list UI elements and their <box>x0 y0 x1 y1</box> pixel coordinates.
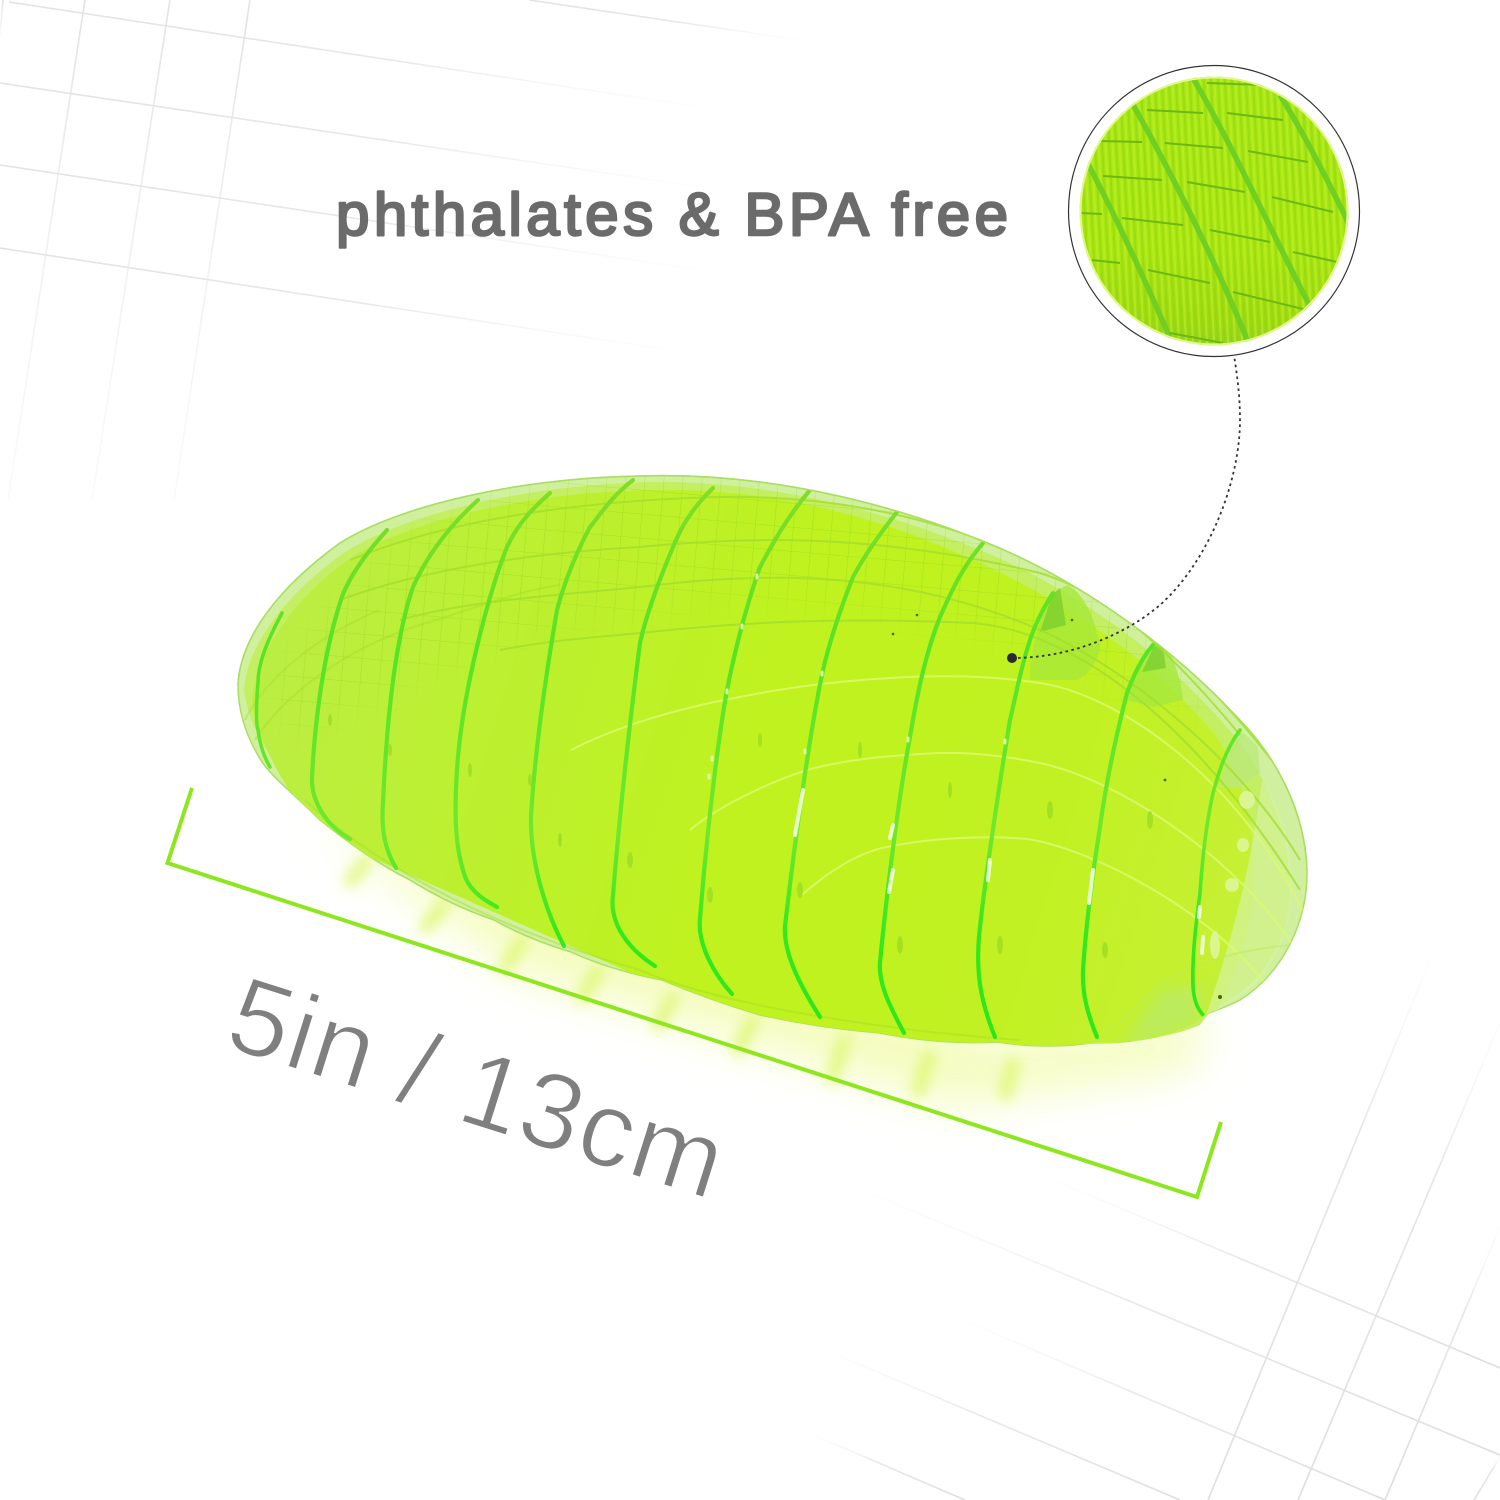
size label: 5in / 13cm: 5in / 13cm <box>215 953 740 1222</box>
outer ring <box>1068 66 1360 356</box>
bright green ribs <box>256 480 1240 1037</box>
pale right lobes <box>1205 780 1292 1018</box>
body rim <box>238 476 1307 870</box>
background grid: top left <box>0 0 800 500</box>
close-up texture <box>1080 76 1350 346</box>
dark-green upper latitude lines <box>340 497 1300 890</box>
bubbles and specks <box>328 714 1153 958</box>
glow under the toy <box>320 825 1210 1105</box>
dotted connector line <box>1007 355 1240 663</box>
pale lower latitude lines <box>245 585 1305 1040</box>
connector dot <box>1007 653 1017 663</box>
inner pockets <box>1030 585 1260 787</box>
upper hatch grid <box>272 476 1220 731</box>
mid shell layer <box>244 482 1290 1044</box>
size bracket <box>168 788 1221 1197</box>
outer translucent shell <box>238 476 1307 1046</box>
white highlights on ribs <box>709 575 1203 953</box>
background grid: bottom right <box>809 960 1500 1500</box>
main core fill <box>244 476 1303 1046</box>
callout text: phthalates & BPA free: phthalates & BPA free <box>336 181 1008 248</box>
toy body <box>220 450 1320 1060</box>
magnified detail circle <box>1068 66 1360 356</box>
